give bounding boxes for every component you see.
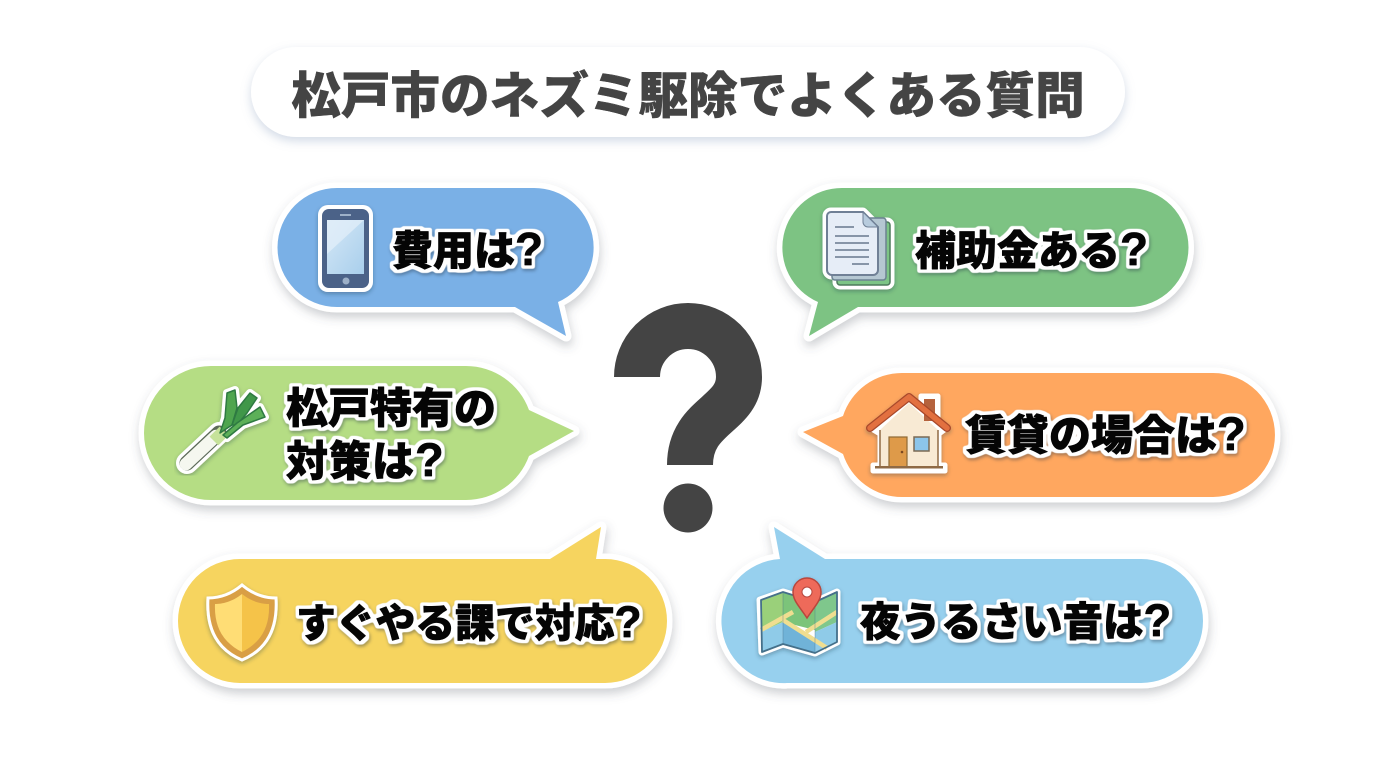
text: Matsudo-specific question [286,385,496,486]
bubble: subsidy [782,188,1188,336]
icon: map with pin [760,578,837,653]
central question mark [637,326,739,532]
text: rental question: 賃貸の場合は? [965,407,1246,460]
text: Matsudo-specific question: 対策は? [286,433,445,486]
bubble: cost [278,188,594,336]
bubble: night noise [721,527,1203,683]
title text: 松戸市のネズミ駆除でよくある質問 [291,68,1085,124]
text: cost question: 費用は? [392,223,543,275]
text: subsidy question: 補助金ある? [915,223,1148,275]
bubble: rental [803,373,1275,497]
icon: house [870,396,947,471]
text: Matsudo-specific question: 松戸特有の [286,385,496,432]
title pill [251,47,1125,137]
icon: leek [186,390,265,464]
text: immediate response question: すぐやる課で対応? [296,598,642,647]
bubble: Matsudo-specific measures [144,366,574,500]
text: night noise question: 夜うるさい音は? [860,595,1171,646]
icon: smartphone [318,205,373,292]
icon: shield [208,585,276,660]
bubble: immediate response [178,527,667,683]
icon: documents [827,212,890,285]
